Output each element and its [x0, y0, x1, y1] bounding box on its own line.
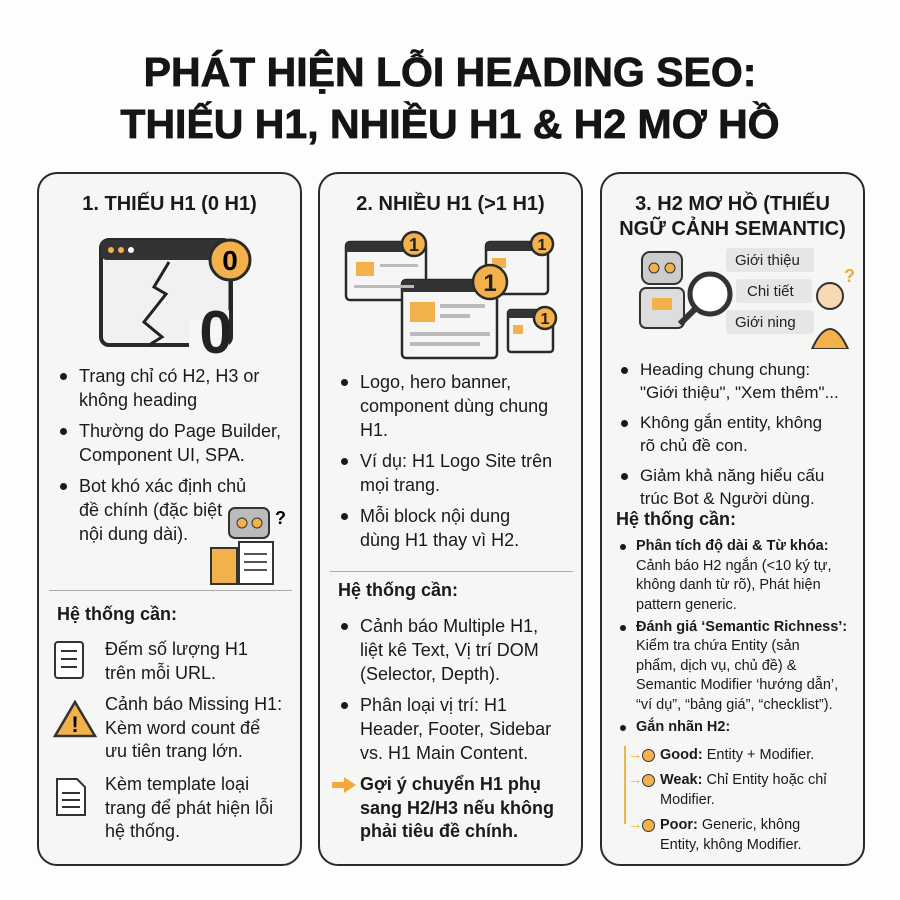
bullets 2: Ví dụ: H1 Logo Site trên — [360, 451, 552, 471]
label tree: Entity, không Modifier. — [660, 836, 802, 852]
heading 2: 2. NHIỀU H1 (>1 H1) — [356, 193, 545, 215]
bullets 1: Thường do Page Builder, — [79, 421, 281, 441]
icon: multiple browsers: 1 — [541, 311, 550, 328]
bullets 2b — [341, 616, 551, 763]
icon: multiple browsers: 1 — [538, 237, 547, 254]
panel: H2 mơ hồ — [600, 172, 865, 866]
bullets 1: Trang chỉ có H2, H3 or — [79, 366, 259, 386]
bullets 1: không heading — [79, 390, 197, 410]
bullets 2: Mỗi block nội dung — [360, 506, 510, 526]
item: checklist — [54, 639, 248, 682]
item: warning: ! — [71, 712, 79, 737]
bullets 3b: Kiểm tra chứa Entity (sản — [636, 638, 800, 654]
icon: robot with magnifier and labels — [639, 248, 855, 349]
panel: thiếu H1 — [37, 172, 302, 866]
label tree — [624, 746, 827, 852]
bullets 3: Giảm khả năng hiểu cấu — [640, 466, 824, 485]
bullets 2: dùng H1 thay vì H2. — [360, 530, 519, 550]
callout: arrow suggestion: phải tiêu đề chính. — [360, 821, 518, 841]
bullets 2b: Cảnh báo Multiple H1, — [360, 616, 538, 636]
item: template: trang để phát hiện lỗi — [105, 798, 273, 818]
bullets 1: Component UI, SPA. — [79, 445, 245, 465]
bullets 2b: (Selector, Depth). — [360, 664, 500, 684]
bullets 3: Heading chung chung: — [640, 360, 810, 379]
subheading 2: Hệ thống cần: — [338, 580, 458, 600]
label tree: → — [628, 747, 642, 763]
bullets 3b: Đánh giá ‘Semantic Richness’: — [636, 618, 847, 634]
bullets 3b: pattern generic. — [636, 596, 737, 612]
bullets 1: nội dung dài). — [79, 524, 188, 544]
bullets 1: Bot khó xác định chủ — [79, 476, 246, 496]
bullets 3b: không danh từ rõ), Phát hiện — [636, 577, 821, 593]
bullets 2b: Phân loại vị trí: H1 — [360, 695, 507, 715]
item: warning: ưu tiên trang lớn. — [105, 741, 243, 761]
heading 3 — [619, 192, 846, 240]
bullets 3b: Semantic Modifier ‘hướng dẫn’, — [636, 677, 838, 693]
icon: multiple browsers: 1 — [483, 270, 497, 297]
item: template: hệ thống. — [105, 821, 180, 841]
bullets 3b: Cảnh báo H2 ngắn (<10 ký tự, — [636, 558, 832, 574]
callout: arrow suggestion: sang H2/H3 nếu không — [360, 798, 554, 818]
bullets 3b: phẩm, dịch vụ, chủ đề) & — [636, 658, 796, 674]
bullets 3: trúc Bot & Người dùng. — [640, 489, 815, 508]
heading 3: NGỮ CẢNH SEMANTIC) — [619, 218, 846, 240]
bullets 1 — [60, 366, 281, 544]
item: template — [56, 774, 273, 841]
label tree: → — [628, 817, 642, 833]
subheading 1: Hệ thống cần: — [57, 604, 177, 624]
title: PHÁT HIỆN LỖI HEADING SEO: — [144, 49, 756, 95]
icon: confused robot — [210, 507, 286, 585]
bullets 3: rõ chủ đề con. — [640, 436, 748, 455]
bullets 2: Logo, hero banner, — [360, 372, 511, 392]
item: checklist: Đếm số lượng H1 — [105, 639, 248, 659]
icon: broken browser: 0 — [222, 245, 238, 276]
item: warning: Cảnh báo Missing H1: — [105, 694, 282, 714]
bullets 2: mọi trang. — [360, 475, 440, 495]
label tree: Good: Entity + Modifier. — [660, 747, 814, 763]
icon: robot with magnifier and labels: Giới thiệu — [735, 252, 800, 269]
label tree: Poor: Generic, không — [660, 817, 800, 833]
icon: robot with magnifier and labels: Chi tiết — [747, 283, 795, 300]
heading 1: 1. THIẾU H1 (0 H1) — [82, 193, 257, 215]
icon: robot with magnifier and labels: Giới ning — [735, 314, 796, 331]
icon: confused robot: ? — [275, 508, 286, 528]
label tree: Weak: Chỉ Entity hoặc chỉ — [660, 772, 827, 788]
item: template: Kèm template loại — [105, 774, 249, 794]
panel: nhiều H1 — [318, 172, 583, 866]
icon: broken browser — [99, 238, 252, 357]
item: warning — [53, 694, 282, 761]
callout: arrow suggestion — [332, 774, 554, 841]
bullets 2: component dùng chung — [360, 396, 548, 416]
bullets 3 — [621, 360, 839, 508]
callout: arrow suggestion: Gợi ý chuyển H1 phụ — [360, 774, 541, 794]
bullets 2 — [341, 372, 552, 550]
bullets 1: đề chính (đặc biệt — [79, 500, 222, 520]
item: checklist: trên mỗi URL. — [105, 662, 216, 682]
heading 3: 3. H2 MƠ HỒ (THIẾU — [635, 193, 830, 215]
bullets 2: H1. — [360, 420, 388, 440]
icon: multiple browsers — [344, 230, 558, 360]
icon: multiple browsers: 1 — [409, 235, 419, 255]
subheading 3: Hệ thống cần: — [616, 509, 736, 529]
bullets 3: Không gắn entity, không — [640, 413, 822, 432]
bullets 3: "Giới thiệu", "Xem thêm"... — [640, 383, 839, 402]
label tree: → — [628, 772, 642, 788]
label tree: Modifier. — [660, 792, 715, 808]
icon: robot with magnifier and labels: ? — [844, 266, 855, 286]
title: THIẾU H1, NHIỀU H1 & H2 MƠ HỒ — [120, 101, 780, 147]
bullets 2b: liệt kê Text, Vị trí DOM — [360, 640, 539, 660]
bullets 3b — [620, 538, 847, 734]
bullets 3b: “ví dụ”, “bảng giá”, “checklist”). — [636, 696, 833, 712]
bullets 2b: Header, Footer, Sidebar — [360, 719, 551, 739]
bullets 3b: Gắn nhãn H2: — [636, 718, 730, 734]
item: warning: Kèm word count để — [105, 718, 260, 738]
bullets 3b: Phân tích độ dài & Từ khóa: — [636, 538, 829, 554]
bullets 2b: vs. H1 Main Content. — [360, 743, 528, 763]
title — [120, 49, 780, 147]
